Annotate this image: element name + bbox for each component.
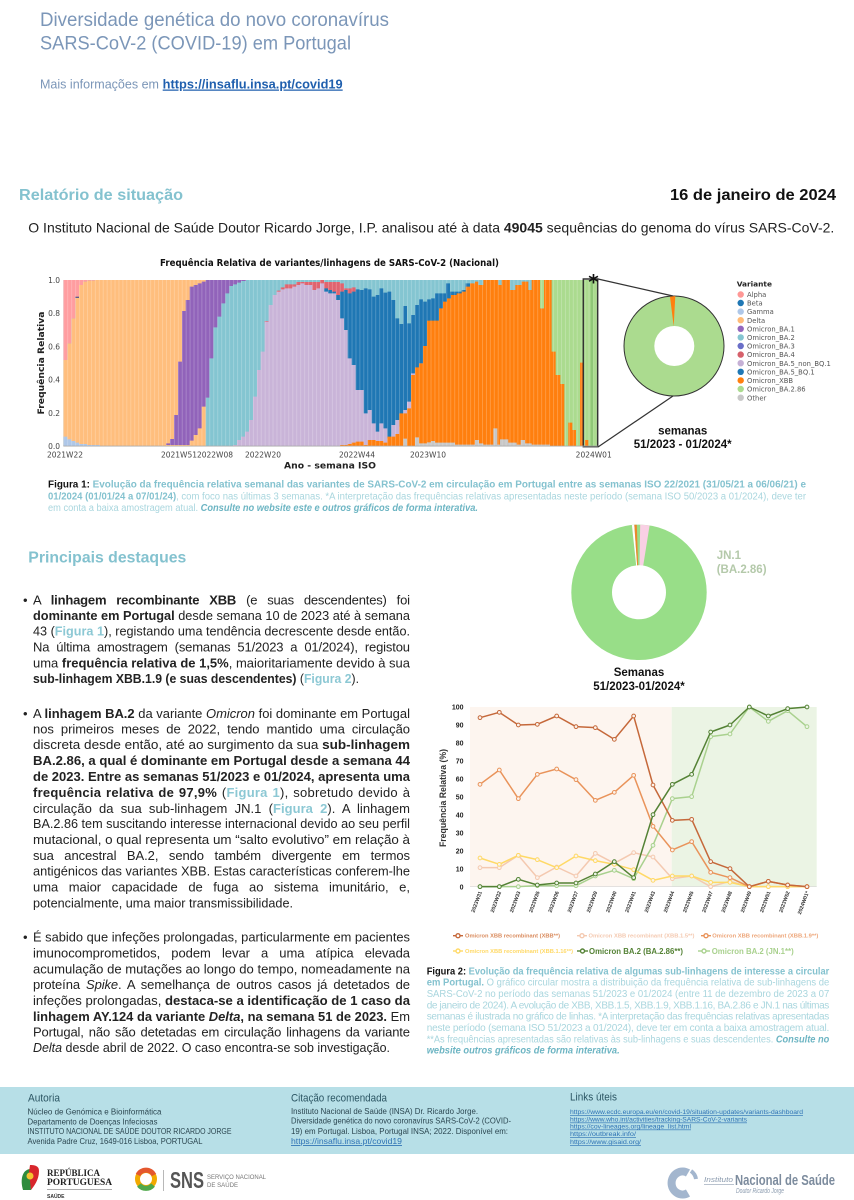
x axis ticks: 2023W49 <box>740 891 753 914</box>
donut slice label: JN.1 <box>717 550 742 562</box>
donut caption: Semanas <box>614 667 664 679</box>
text block: Delta bullet: proteína Spike. A semelhança de outros casos já detetados de <box>33 977 410 992</box>
stacked bars <box>63 279 598 447</box>
more information link: https://insaflu.insa.pt/covid19 <box>163 78 343 92</box>
x axis ticks: 2023W45 <box>682 891 696 914</box>
variant legend: Omicron_BA.3 <box>747 343 795 351</box>
text block: XBB bullet: 43 (Figura 1), registando uma tendência decrescente desde então. <box>33 624 410 638</box>
y axis ticks: 0 <box>460 884 464 891</box>
x axis ticks: 2023W32 <box>490 891 503 914</box>
y axis ticks: 30 <box>456 830 464 837</box>
donut caption: 51/2023-01/2024* <box>593 681 685 693</box>
text block: XBB bullet: A linhagem recombinante XBB (e suas descendentes) foi <box>33 592 410 608</box>
text block: BA.2 bullet: frequência relativa de 97,9% (Figura 1), sobretudo devido à <box>33 785 411 800</box>
authorship: Departamento de Doenças Infeciosas <box>28 1116 158 1126</box>
x axis ticks: 2023W33 <box>509 891 522 914</box>
useful links: https://www.who.int/activities/tracking-SARS-CoV-2-variants <box>570 1116 748 1124</box>
y axis labels: 1.0 <box>48 276 60 285</box>
x axis ticks: 2023W43 <box>644 891 657 914</box>
y axis title: Frequência Relativa <box>36 312 47 414</box>
title: Diversidade genética do novo coronavírus <box>40 9 389 31</box>
text block: XBB bullet: Na última amostragem (semanas 51/2023 a 01/2024), registou <box>33 640 410 654</box>
logo: SNS <box>138 1167 266 1193</box>
y axis labels: 0.8 <box>48 309 60 318</box>
text block: BA.2 bullet: antigénicos das variantes XBB. Estas características conferem-lhe <box>33 864 410 878</box>
figure 1 caption <box>48 480 807 514</box>
donut label: 51/2023 - 01/2024* <box>634 439 732 451</box>
y axis ticks: 90 <box>456 722 464 730</box>
y axis ticks: 20 <box>456 848 464 855</box>
x axis labels: 2022W08 <box>197 450 233 460</box>
logo: Instituto Nacional de Saúde: Doutor Ricardo Jorge <box>736 1186 784 1195</box>
x axis ticks: 2023W36 <box>548 891 561 914</box>
figure 2 caption: semanas é ilustrada no gráfico de linhas. *A interpretação das frequências relativas apresentadas <box>427 1011 829 1022</box>
y axis ticks: 80 <box>456 740 464 748</box>
text block: BA.2 bullet: BA.2.86 tem suscitando interesse internacional devido ao seu perfil <box>33 816 410 831</box>
shaded periods <box>470 707 817 887</box>
text block: XBB bullet: dominante em Portugal desde semana 10 de 2023 até à semana <box>33 608 411 623</box>
x axis labels: 2023W10 <box>410 450 446 460</box>
text block: XBB bullet: • <box>23 592 28 608</box>
x axis labels: 2021W51 <box>161 450 197 460</box>
logo: República Portuguesa: PORTUGUESA <box>47 1178 112 1188</box>
text block: BA.2 bullet: discreta desde então, até ao surgimento da sua sub-linhagem <box>33 737 410 752</box>
line chart legend: Omicron BA.2 (JN.1**) <box>712 947 794 956</box>
x axis ticks: 2023W48 <box>721 891 734 914</box>
text block: XBB bullet: uma frequência relativa de 1,5%, maioritariamente devido à sua <box>33 656 411 670</box>
figure 1 caption: em conta a baixa amostragem atual. Consulte no website este e outros gráficos de forma interativa. <box>48 503 478 514</box>
figure 1 caption: 01/2024 (01/01/24 a 07/01/24), com foco nas últimas 3 semanas. *A interpretação das frequências relativas apresentadas neste período (semana ISO 50/2023 a 01/2024), deve ter <box>48 492 807 502</box>
figure 2 caption: de janeiro de 2024). A evolução de XBB, XBB.1.5, XBB.1.9, XBB.1.16, BA.2.86 e JN.1 nas últimas <box>427 1000 829 1011</box>
variant legend: Other <box>747 394 767 402</box>
line chart legend <box>453 934 818 956</box>
authorship <box>28 1092 232 1146</box>
zoom connector lines <box>598 279 673 447</box>
figure 2 caption: website outros gráficos de forma interativa. <box>427 1046 620 1057</box>
text block: BA.2 bullet: • <box>23 706 28 721</box>
variant legend: Delta <box>747 317 765 325</box>
text block: BA.2 bullet: BA.2.86, a qual é dominante em Portugal desde a semana 44 <box>33 753 411 768</box>
donut chart: sub-lineages <box>571 525 707 660</box>
text block: BA.2 bullet: A linhagem BA.2 da variante Omicron foi dominante em Portugal <box>33 706 410 721</box>
y axis ticks: 50 <box>456 794 464 801</box>
figure 2 caption: neste período (semana ISO 51/2023 a 01/2024), deve ter em conta a baixa amostragem atual. <box>427 1023 829 1034</box>
variant legend: Gamma <box>747 308 774 316</box>
x axis ticks: 2023W41 <box>625 891 638 914</box>
text block: Delta bullet: imunocomprometidos, podem levar a uma atípica elevada <box>33 946 411 960</box>
useful links <box>570 1092 803 1146</box>
x axis labels: 2021W22 <box>47 450 83 460</box>
text block: BA.2 bullet <box>23 706 411 910</box>
useful links: https://www.ecdc.europa.eu/en/covid-19/situation-updates/variants-dashboard <box>570 1109 803 1116</box>
logo: Instituto Nacional de Saúde <box>672 1171 835 1195</box>
useful links: https://www.gisaid.org/ <box>570 1139 641 1146</box>
recommended citation: Citação recomendada <box>291 1092 388 1104</box>
x axis title: Ano - semana ISO <box>284 462 376 472</box>
text block: BA.2 bullet: circulação da sua sub-linhagem JN.1 (Figura 2). A linhagem <box>33 801 410 816</box>
line chart legend: Omicron XBB recombinant (XBB.1.16**) <box>465 949 573 955</box>
x axis ticks: 2024W01* <box>797 890 811 915</box>
x axis ticks: 2023W31 <box>471 891 484 914</box>
text block: Delta bullet <box>23 930 411 1055</box>
recommended citation <box>291 1092 511 1146</box>
useful links: https://outbreak.info/ <box>570 1131 636 1138</box>
heading: highlights: Principais destaques <box>28 550 186 566</box>
title <box>40 9 389 54</box>
x axis ticks: 2023W51 <box>759 891 773 914</box>
donut label <box>634 426 732 451</box>
variant legend: Omicron_BA.2 <box>747 334 795 342</box>
report date: 16 de janeiro de 2024 <box>670 187 836 204</box>
x axis ticks <box>471 890 811 915</box>
y axis labels: 0.2 <box>48 409 60 418</box>
variant legend: Alpha <box>747 291 766 299</box>
x axis labels: 2022W44 <box>339 450 375 460</box>
text block: Delta bullet: acumulação de mutações ao longo do tempo, nomeadamente na <box>33 962 411 976</box>
y axis labels: 0.4 <box>48 376 60 384</box>
text block: BA.2 bullet: nos primeiros meses de 2022, tendo mantido uma circulação <box>33 722 410 736</box>
text block: BA.2 bullet: uma maior capacidade de fuga ao sistema imunitário, e, <box>33 880 410 894</box>
more information link: Mais informações em <box>40 78 159 92</box>
donut: last three weeks <box>624 296 724 396</box>
intro sentence: O Instituto Nacional de Saúde Doutor Ricardo Jorge, I.P. analisou até à data 49045 sequências do genoma do vírus SARS-CoV-2. <box>28 220 834 236</box>
authorship: INSTITUTO NACIONAL DE SAÚDE DOUTOR RICARDO JORGE <box>28 1126 232 1136</box>
y axis ticks: 60 <box>456 776 464 784</box>
text block: Delta bullet: Portugal, não são detetadas em circulação linhagens da variante <box>33 1024 410 1040</box>
text block: Delta bullet: Delta desde abril de 2022. O caso encontra-se sob investigação. <box>33 1040 390 1055</box>
x axis labels: 2022W20 <box>245 450 281 460</box>
variant legend: Omicron_XBB <box>747 377 793 385</box>
donut slice label: (BA.2.86) <box>717 564 767 576</box>
x axis ticks: 2023W52 <box>778 891 792 914</box>
y axis title: Frequência Relativa (%) <box>438 749 448 847</box>
x axis labels <box>47 450 612 460</box>
line chart legend: Omicron XBB recombinant (XBB**) <box>465 934 560 940</box>
donut label: semanas <box>658 426 707 438</box>
x axis ticks: 2023W47 <box>702 891 715 914</box>
variant legend: Omicron_BA.2.86 <box>747 386 806 394</box>
useful links: Links úteis <box>570 1092 617 1104</box>
asterisk marker: * <box>588 270 599 294</box>
x axis ticks: 2023W35 <box>528 891 542 914</box>
variant legend: Omicron_BA.5_BQ.1 <box>747 368 815 376</box>
recommended citation: https://insaflu.insa.pt/covid19 <box>291 1136 402 1146</box>
figure 2 caption: Figura 2: Evolução da frequência relativa de algumas sub-linhagens de interesse a circular <box>427 966 829 977</box>
useful links: https://cov-lineages.org/lineage_list.html <box>570 1124 692 1130</box>
heading: situation report: Relatório de situação <box>19 187 183 204</box>
variant legend: Omicron_BA.5_non_BQ.1 <box>747 360 831 368</box>
donut slice label <box>717 550 767 576</box>
y axis labels: 0.0 <box>48 442 60 451</box>
text block: BA.2 bullet: potencialmente, uma maior transmissibilidade. <box>33 896 293 910</box>
figure 2 caption: **As frequências apresentadas são relativas às sub-linhagens e suas descendentes. Consulte no <box>427 1034 829 1045</box>
x axis ticks: 2023W44 <box>663 891 676 914</box>
panel: footer <box>0 1087 854 1154</box>
x axis ticks: 2023W39 <box>586 891 599 914</box>
text block: Delta bullet: É sabido que infeções prolongadas, particularmente em pacientes <box>33 930 410 944</box>
text block: Delta bullet: linhagem AY.124 da variante Delta, na semana 51 de 2023. Em <box>33 1009 410 1024</box>
variant legend: Omicron_BA.4 <box>747 351 795 359</box>
x axis labels: 2024W01 <box>576 450 612 460</box>
variant legend: Omicron_BA.1 <box>747 325 795 333</box>
text block: BA.2 bullet: mutacional, o qual representa um “salto evolutivo” em relação à <box>33 832 411 847</box>
recommended citation: Diversidade genética do novo coronavírus SARS-CoV-2 (COVID- <box>291 1116 511 1126</box>
text block: XBB bullet: sub-linhagem XBB.1.9 (e suas descendentes) (Figura 2). <box>33 671 359 686</box>
data lines <box>480 707 807 887</box>
panel: figure 1 stacked bar chart <box>36 258 831 472</box>
logo: República Portuguesa: SAÚDE <box>47 1193 65 1200</box>
logo: República Portuguesa: REPÚBLICA <box>47 1167 100 1179</box>
logo: Instituto Nacional de Saúde: Instituto <box>704 1175 733 1184</box>
y axis ticks: 10 <box>456 866 464 873</box>
line chart legend: Omicron XBB recombinant (XBB.1.9**) <box>712 934 818 940</box>
text block: Delta bullet: • <box>23 930 28 944</box>
text block: BA.2 bullet: sua ancestral BA.2, sendo também divergente em termos <box>33 848 410 863</box>
logo: SNS: SERVIÇO NACIONAL <box>207 1174 266 1181</box>
donut caption <box>593 667 685 693</box>
authorship: Avenida Padre Cruz, 1649-016 Lisboa, PORTUGAL <box>28 1136 203 1146</box>
recommended citation: Instituto Nacional de Saúde (INSA) Dr. Ricardo Jorge. <box>291 1106 478 1116</box>
y axis ticks: 100 <box>452 704 464 712</box>
line chart legend: Omicron BA.2 (BA.2.86**) <box>589 947 683 956</box>
y axis ticks: 70 <box>456 758 464 766</box>
logo: SNS: SNS <box>170 1167 204 1193</box>
variant legend: Variante <box>737 280 772 288</box>
figure 2 caption: SARS-CoV-2 no período das semanas 51/2023 e 01/2024 (entre 11 de dezembro de 2023 a 07 <box>427 989 830 1000</box>
line chart legend: Omicron XBB recombinant (XBB.1.5**) <box>588 934 695 940</box>
logo: SNS: DE SAÚDE <box>207 1180 238 1189</box>
text block: BA.2 bullet: de 2023. Entre as semanas 51/2023 e 01/2024, apresenta uma <box>33 769 411 784</box>
authorship: Núcleo de Genómica e Bioinformática <box>28 1106 162 1116</box>
recommended citation: 19) em Portugal. Lisboa, Portugal INSA; 2022. Disponível em: <box>291 1126 508 1136</box>
y axis labels: 0.6 <box>48 342 60 352</box>
title: SARS-CoV-2 (COVID-19) em Portugal <box>40 32 351 54</box>
figure 2 caption <box>427 966 830 1057</box>
chart title: Frequência Relativa de variantes/linhagens de SARS-CoV-2 (Nacional) <box>160 258 499 269</box>
x axis ticks: 2023W40 <box>605 891 619 914</box>
more information link <box>40 78 343 92</box>
line chart: sub-lineage frequency <box>438 704 818 956</box>
y axis labels <box>48 276 60 451</box>
text block: Delta bullet: infeções prolongadas, destaca-se a identificação de 1 caso da <box>33 993 411 1008</box>
figure 2 caption: em Portugal. O gráfico circular mostra a distribuição da frequência relativa de sub-linhagens de <box>427 978 830 989</box>
figure 1 caption: Figura 1: Evolução da frequência relativa semanal das variantes de SARS-CoV-2 em circulação em Portugal entre as semanas ISO 22/2021 (31/05/21 a 06/06/21) e <box>48 480 806 490</box>
x axis ticks: 2023W37 <box>567 891 580 914</box>
y axis ticks: 40 <box>456 812 464 819</box>
variant legend: Beta <box>747 300 763 308</box>
authorship: Autoria <box>28 1092 61 1104</box>
y axis ticks <box>452 704 464 891</box>
text block: XBB bullet <box>23 592 411 686</box>
logo: República Portuguesa <box>22 1165 112 1200</box>
variant legend <box>737 280 831 402</box>
